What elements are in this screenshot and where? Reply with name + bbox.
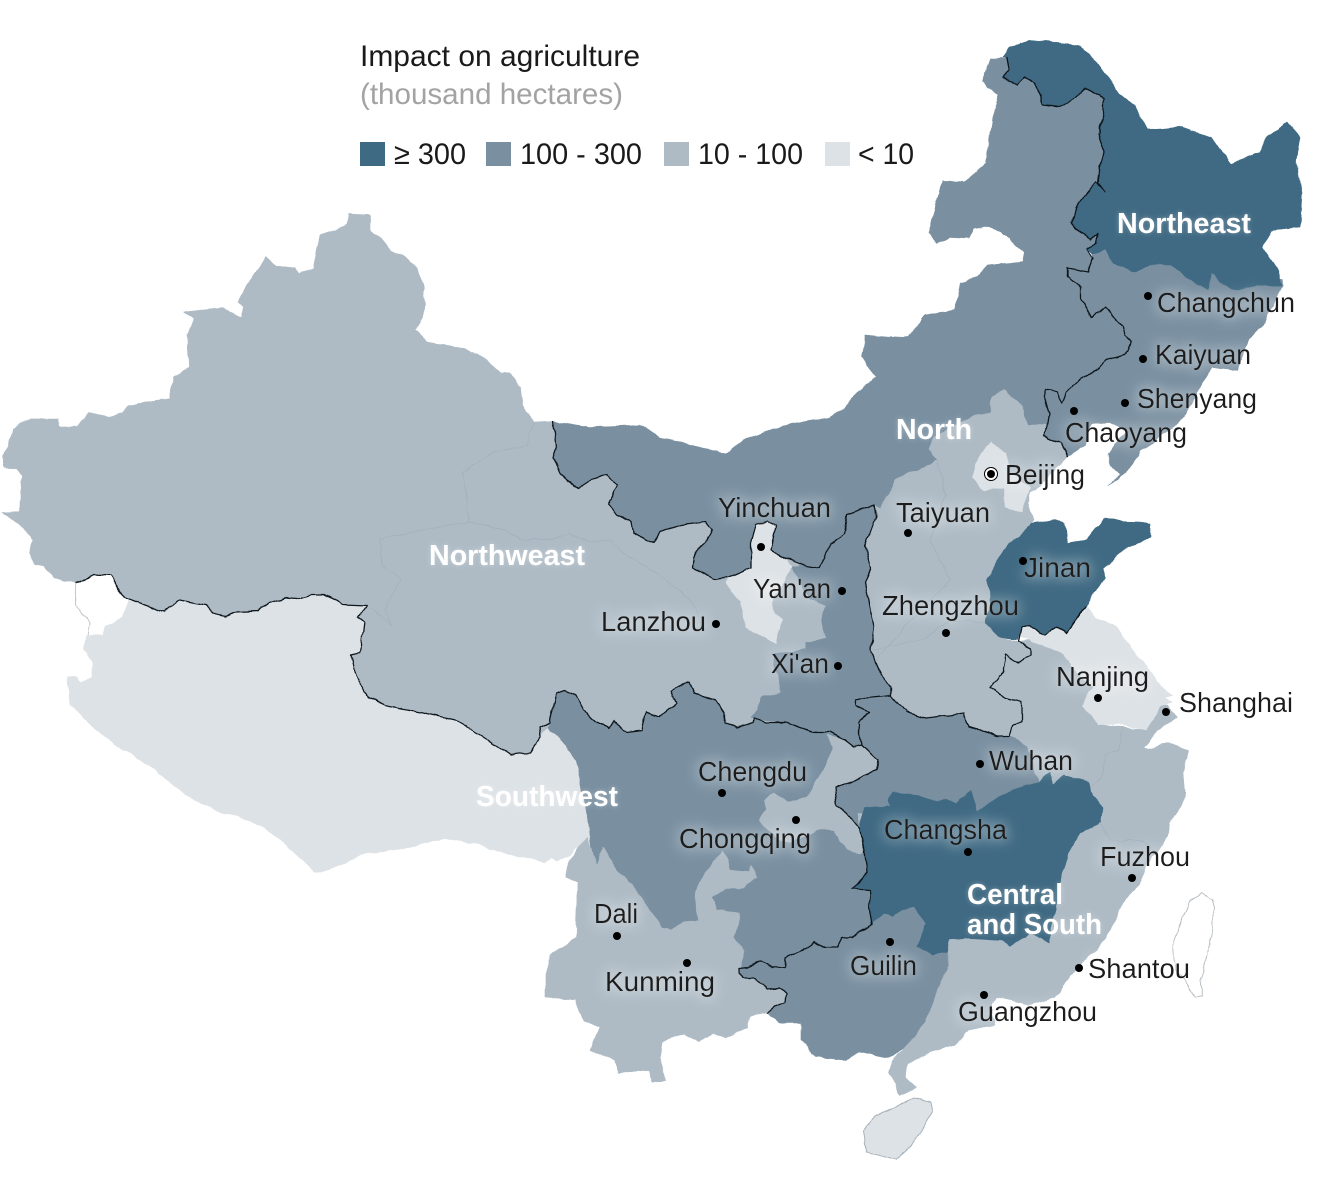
label: Changsha: Changsha (884, 814, 1007, 845)
legend title: Impact on agriculture (360, 40, 640, 73)
region: Shandong (300 and above) (985, 518, 1151, 640)
region: Guangxi (100 - 300) (739, 907, 948, 1060)
label: Shantou: Shantou (1088, 953, 1190, 984)
region names (429, 208, 1251, 941)
region: Beijing and Tianjin (under 10) (973, 442, 1030, 513)
region name: Southwest: Southwest (476, 781, 618, 813)
label: Shenyang: Shenyang (1137, 383, 1257, 414)
legend item: 10 to 100: 10 - 100 (698, 138, 803, 171)
region: Yan'an and Ningxia (under 10) (726, 521, 792, 643)
label: Chengdu: Chengdu (698, 756, 807, 787)
region: north China and Henan (10 - 100) (865, 390, 1068, 737)
region: Jiangsu (under 10) (1019, 608, 1172, 730)
region: northeast Liaoning and Jilin (100 - 300) (1043, 250, 1283, 485)
label: Dali: Dali (594, 898, 638, 929)
region name: Central and South: Central (967, 879, 1063, 911)
label: Guangzhou: Guangzhou (958, 996, 1097, 1027)
label: Xi'an: Xi'an (771, 648, 829, 679)
island: Hainan (864, 1098, 932, 1160)
label: Chongqing: Chongqing (679, 823, 811, 854)
label: Guilin: Guilin (850, 950, 917, 981)
region: east coast Anhui Zhejiang Fujian Guangdong (10 - 100) (889, 640, 1188, 1095)
island: Taiwan (1173, 892, 1213, 997)
region name: Central and South (967, 879, 1102, 941)
region: southwest Tibet (under 10) (67, 595, 591, 873)
marker: Beijing capital (984, 468, 998, 480)
label: Kaiyuan: Kaiyuan (1155, 339, 1251, 370)
legend (360, 40, 914, 171)
city labels (594, 287, 1295, 1027)
label: Shanghai: Shanghai (1179, 687, 1293, 718)
region: Inner Mongolia (100 - 300) (553, 58, 1131, 580)
legend unit: (thousand hectares) (360, 78, 623, 111)
legend item: 300 and above (360, 138, 466, 171)
region: Hunan and Jiangxi (300 and above) (853, 773, 1103, 955)
region: Yunnan (10 - 100) (546, 837, 786, 1082)
label: Nanjing: Nanjing (1056, 661, 1149, 692)
label: Chaoyang: Chaoyang (1065, 417, 1187, 448)
region: northwest (10 - 100) (2, 214, 830, 760)
legend item: 300 and above: ≥ 300 (394, 138, 466, 171)
region: Shaanxi strip and Hubei (100 - 300) (751, 505, 1039, 813)
region: northeast Heilongjiang (300 and above) (1003, 40, 1302, 290)
region: Chongqing and east Sichuan (10 - 100) (759, 735, 878, 853)
interior base fill (600, 700, 1040, 1000)
region: Sichuan and Guizhou (100 - 300) (548, 681, 872, 969)
region name: Northeast: Northeast (1117, 208, 1251, 240)
faint province borders (370, 422, 1155, 850)
legend item: 100 to 300: 100 - 300 (520, 138, 642, 171)
city markers (613, 292, 1170, 999)
label: Changchun: Changchun (1157, 287, 1295, 318)
white notch outline in the far west (76, 583, 90, 635)
label: Yan'an: Yan'an (753, 573, 831, 604)
label: Kunming: Kunming (605, 966, 715, 997)
label: Yinchuan: Yinchuan (718, 492, 831, 523)
black borders between aggregate regions (76, 58, 1131, 1013)
region name: North: North (896, 414, 972, 446)
label: Lanzhou: Lanzhou (601, 606, 706, 637)
label: Fuzhou: Fuzhou (1100, 841, 1190, 872)
region name: Northweast: Northweast (429, 540, 585, 572)
label: Wuhan: Wuhan (989, 745, 1073, 776)
label: Jinan: Jinan (1024, 552, 1091, 583)
label: Taiyuan: Taiyuan (896, 497, 990, 528)
region name: Central and South: and South (967, 909, 1102, 941)
legend item: under 10: < 10 (858, 138, 914, 171)
label: Zhengzhou: Zhengzhou (882, 590, 1019, 621)
label: Beijing: Beijing (1005, 459, 1085, 490)
legend item: under 10 (825, 138, 914, 171)
